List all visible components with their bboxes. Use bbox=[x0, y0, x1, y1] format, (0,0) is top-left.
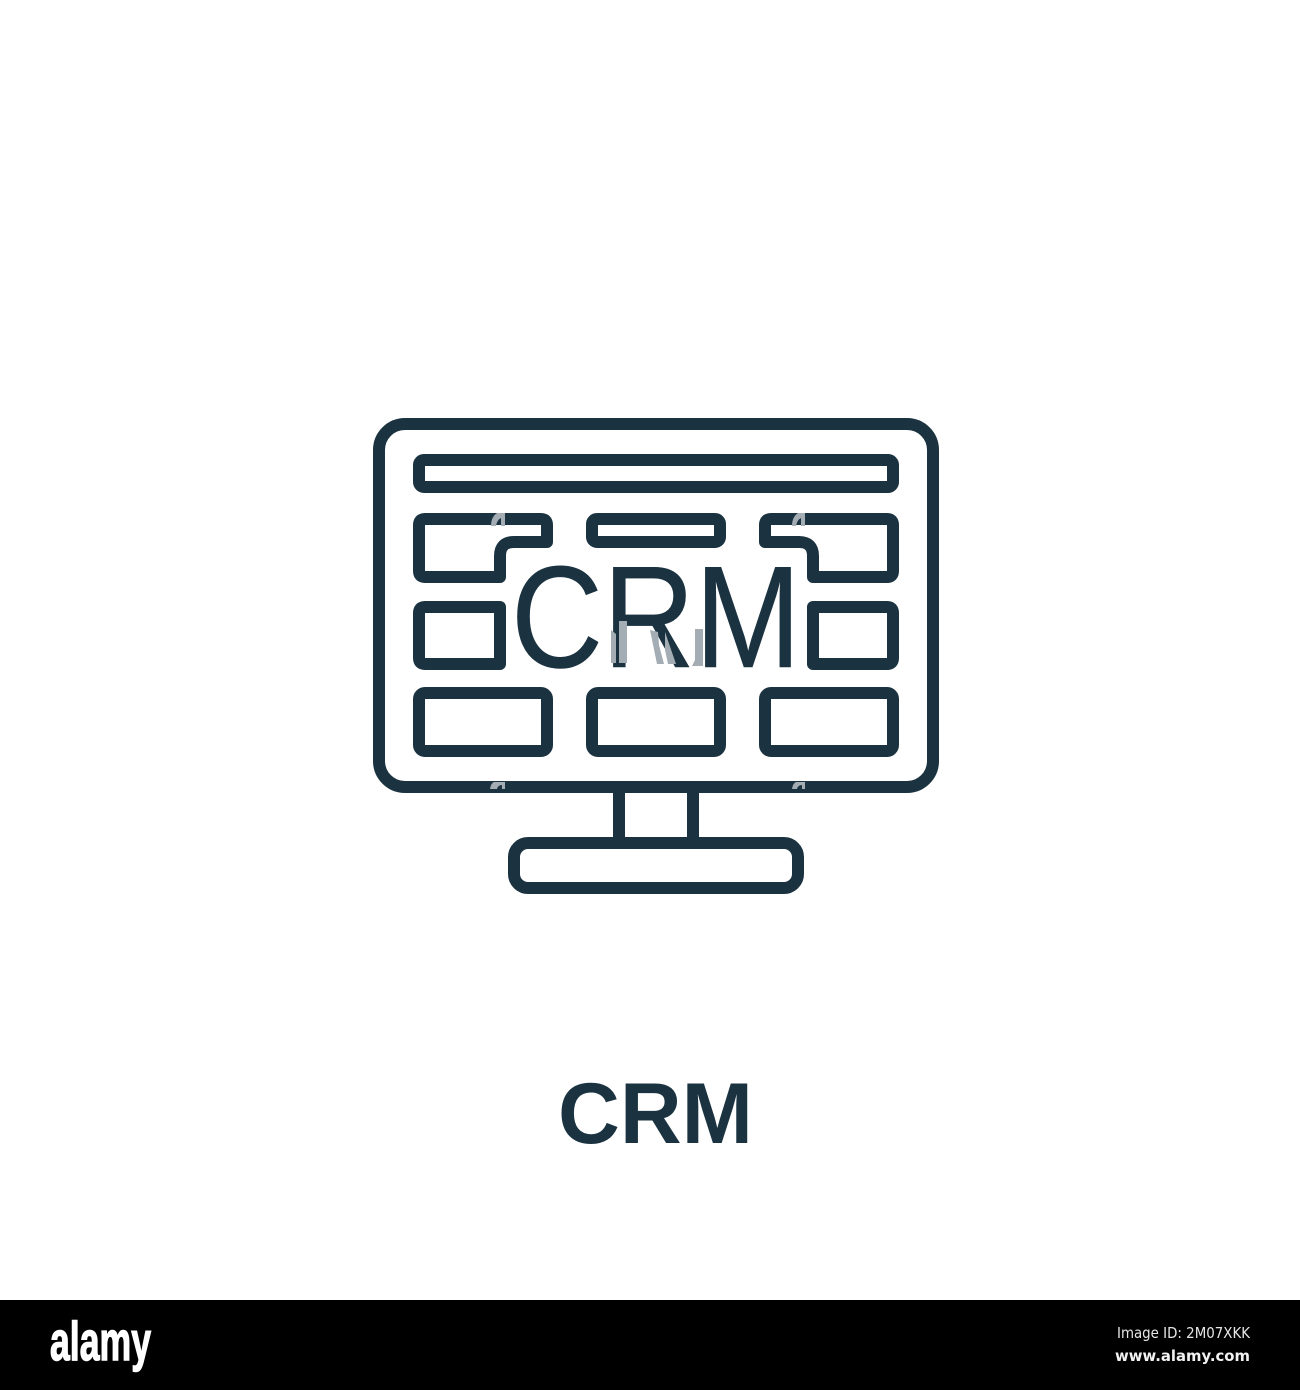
notched cell top right bbox=[765, 519, 893, 577]
notched cell top left bbox=[419, 519, 547, 577]
icon: CRM monitor bbox=[379, 424, 933, 888]
monitor stand base bbox=[514, 843, 798, 888]
footer text: website: www.alamy.com bbox=[1115, 1347, 1250, 1365]
top header bar bbox=[419, 460, 893, 487]
cell bottom left bbox=[419, 693, 547, 751]
monitor stand neck bbox=[619, 787, 693, 843]
short cell top middle bbox=[592, 519, 720, 542]
monitor frame bbox=[379, 424, 933, 787]
watermark fragments bbox=[490, 513, 805, 789]
footer bar bbox=[0, 1300, 1300, 1390]
cell middle right bbox=[813, 607, 893, 664]
cell bottom middle bbox=[592, 693, 720, 751]
cell bottom right bbox=[765, 693, 893, 751]
cell middle left bbox=[419, 607, 500, 664]
caption: CRM: CRM bbox=[558, 1066, 753, 1162]
footer logo: alamy: alamy bbox=[50, 1310, 151, 1372]
footer text: image ID: Image ID: 2M07XKK bbox=[1117, 1324, 1251, 1342]
icon text: CRM on screen: CRM bbox=[511, 536, 801, 698]
